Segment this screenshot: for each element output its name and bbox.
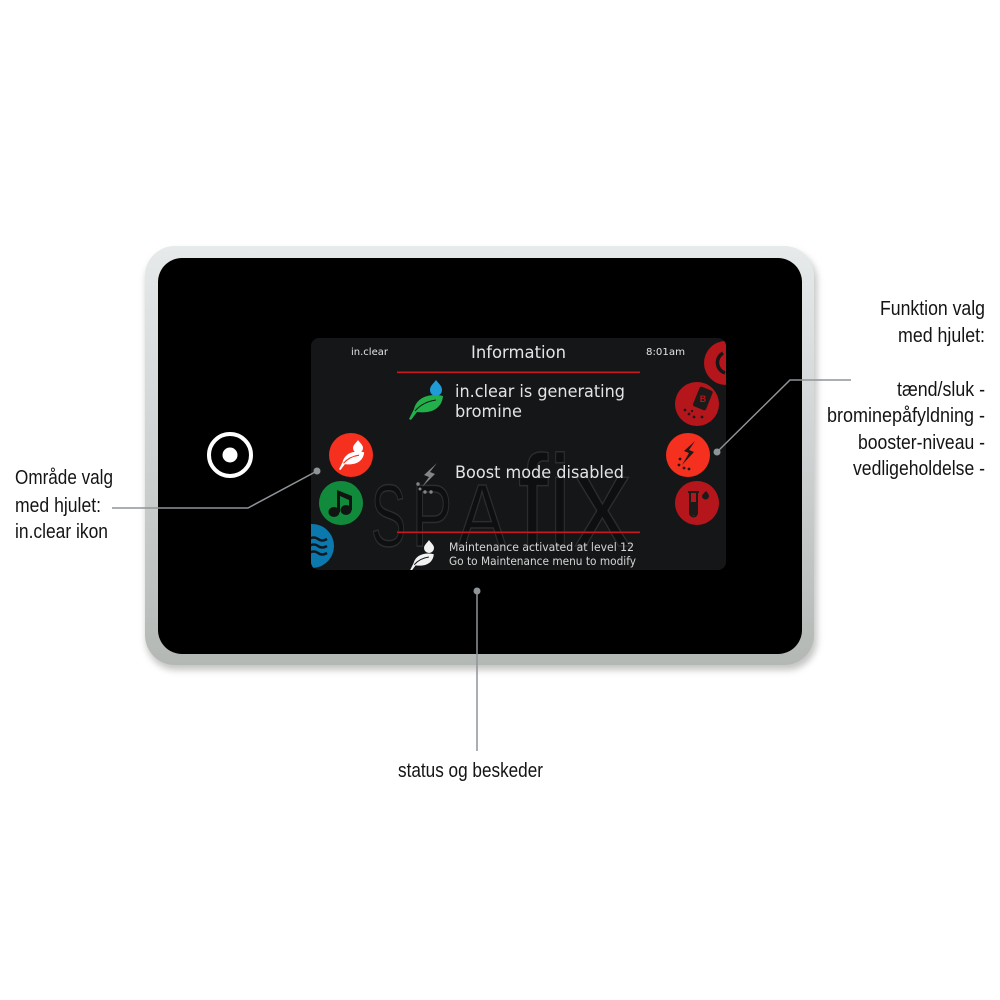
message: in.clear is generating bromine: bromine <box>455 402 522 422</box>
label: status and messages: status og beskeder <box>398 759 543 782</box>
label: right function selection: med hjulet: <box>898 324 985 347</box>
label: right function selection: Funktion valg <box>880 297 985 320</box>
message: maintenance activated: Go to Maintenance menu to modify <box>449 554 636 568</box>
label: left area selection: med hjulet: <box>15 494 101 517</box>
label: right function selection: tænd/sluk - <box>897 378 985 401</box>
icon wheel: power <box>704 341 726 385</box>
device: touch panel <box>145 246 817 670</box>
label: right function selection <box>827 297 985 480</box>
watermark: SPAfix: A <box>458 466 506 565</box>
callout line: right <box>714 380 851 456</box>
device shadow <box>146 251 817 670</box>
header: in.clear: in.clear <box>351 347 389 358</box>
icon: green leaf with blue drop <box>409 380 443 420</box>
icon wheel: in.clear active <box>329 433 373 477</box>
icon: grey bolt <box>416 463 437 494</box>
header: clock: 8:01am <box>646 347 685 358</box>
watermark: SPAfix: P <box>412 466 452 565</box>
icon: home button <box>209 434 251 476</box>
icon wheel: maintenance test tube <box>675 481 719 525</box>
icon wheel: music <box>319 481 363 525</box>
message: maintenance activated: Maintenance activated at level 12 <box>449 540 634 554</box>
infographic: control panel with callouts <box>16 246 984 781</box>
watermark: SPAfix: f <box>518 428 549 574</box>
label: left area selection: Område valg <box>15 466 113 489</box>
callout line: bottom <box>474 588 480 751</box>
message: maintenance activated <box>449 540 636 568</box>
screen <box>311 338 726 570</box>
icon wheel: water <box>311 524 334 568</box>
message: in.clear is generating bromine <box>456 384 624 417</box>
message: in.clear is generating bromine: in.clear is generating <box>455 382 625 402</box>
icon: white leaf with drop <box>410 540 434 571</box>
callout line: left <box>112 468 320 508</box>
red divider top <box>397 372 640 373</box>
message: boost mode disabled: Boost mode disabled <box>455 463 624 483</box>
label: left area selection: in.clear ikon <box>15 520 108 543</box>
icon wheel: bromine refill <box>675 382 719 426</box>
header: Information: Information <box>471 343 566 363</box>
red divider bottom <box>397 532 640 533</box>
watermark: SPAfix: S <box>371 466 406 565</box>
watermark: SPAfix: i <box>549 428 571 574</box>
watermark: SPAfix: x <box>574 428 631 574</box>
black glass <box>158 258 802 654</box>
silver bezel <box>145 246 814 665</box>
label: left area selection <box>15 466 113 543</box>
icon wheel: booster active <box>666 433 710 477</box>
icon wheel: bromine refill: B <box>700 394 707 404</box>
watermark: SPAfix <box>373 451 631 548</box>
